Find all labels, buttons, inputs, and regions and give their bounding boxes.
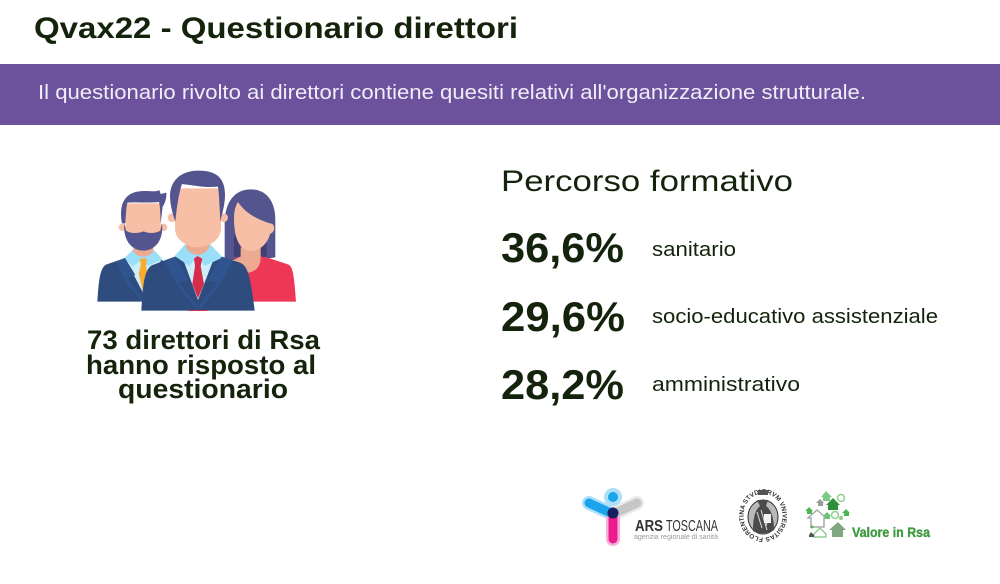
respondents caption: questionario xyxy=(118,374,288,404)
woman xyxy=(225,189,296,302)
stat: amministrativo: amministrativo xyxy=(652,374,800,396)
logo: Valore in Rsa xyxy=(805,491,930,540)
logo: ARS Toscana: ARS xyxy=(635,518,663,535)
stat: socio-educativo: 29,6% xyxy=(501,293,625,340)
logo: ARS Toscana xyxy=(589,488,719,541)
icon: group of three directors xyxy=(97,171,296,311)
logo: university seal: FLORENTINA STVDIORVM VNIVERSITAS xyxy=(739,489,788,542)
central man xyxy=(141,171,255,311)
title: Qvax22 - Questionario direttori xyxy=(34,12,518,45)
respondents caption: hanno risposto al xyxy=(86,350,316,380)
bearded man xyxy=(97,190,170,302)
logo: ARS Toscana: TOSCANA xyxy=(666,518,718,535)
banner text: Il questionario rivolto ai direttori contiene quesiti relativi all'organizzazione strutturale. xyxy=(38,82,866,104)
respondents caption xyxy=(86,325,321,404)
heading: training path: Percorso formativo xyxy=(501,165,793,198)
respondents caption: 73 direttori di Rsa xyxy=(87,325,321,355)
stat: sanitario: sanitario xyxy=(652,239,736,261)
stat: amministrativo: 28,2% xyxy=(501,361,624,408)
stat: socio-educativo: socio-educativo assistenziale xyxy=(652,306,938,328)
stat: socio-educativo xyxy=(501,293,938,340)
banner xyxy=(0,64,1000,125)
logo: Valore in Rsa: Valore in Rsa xyxy=(852,525,930,540)
stat: sanitario xyxy=(501,224,736,271)
stat: sanitario: 36,6% xyxy=(501,224,624,271)
stat: amministrativo xyxy=(501,361,800,408)
logo: ARS Toscana: agenzia regionale di sanità xyxy=(634,532,719,541)
